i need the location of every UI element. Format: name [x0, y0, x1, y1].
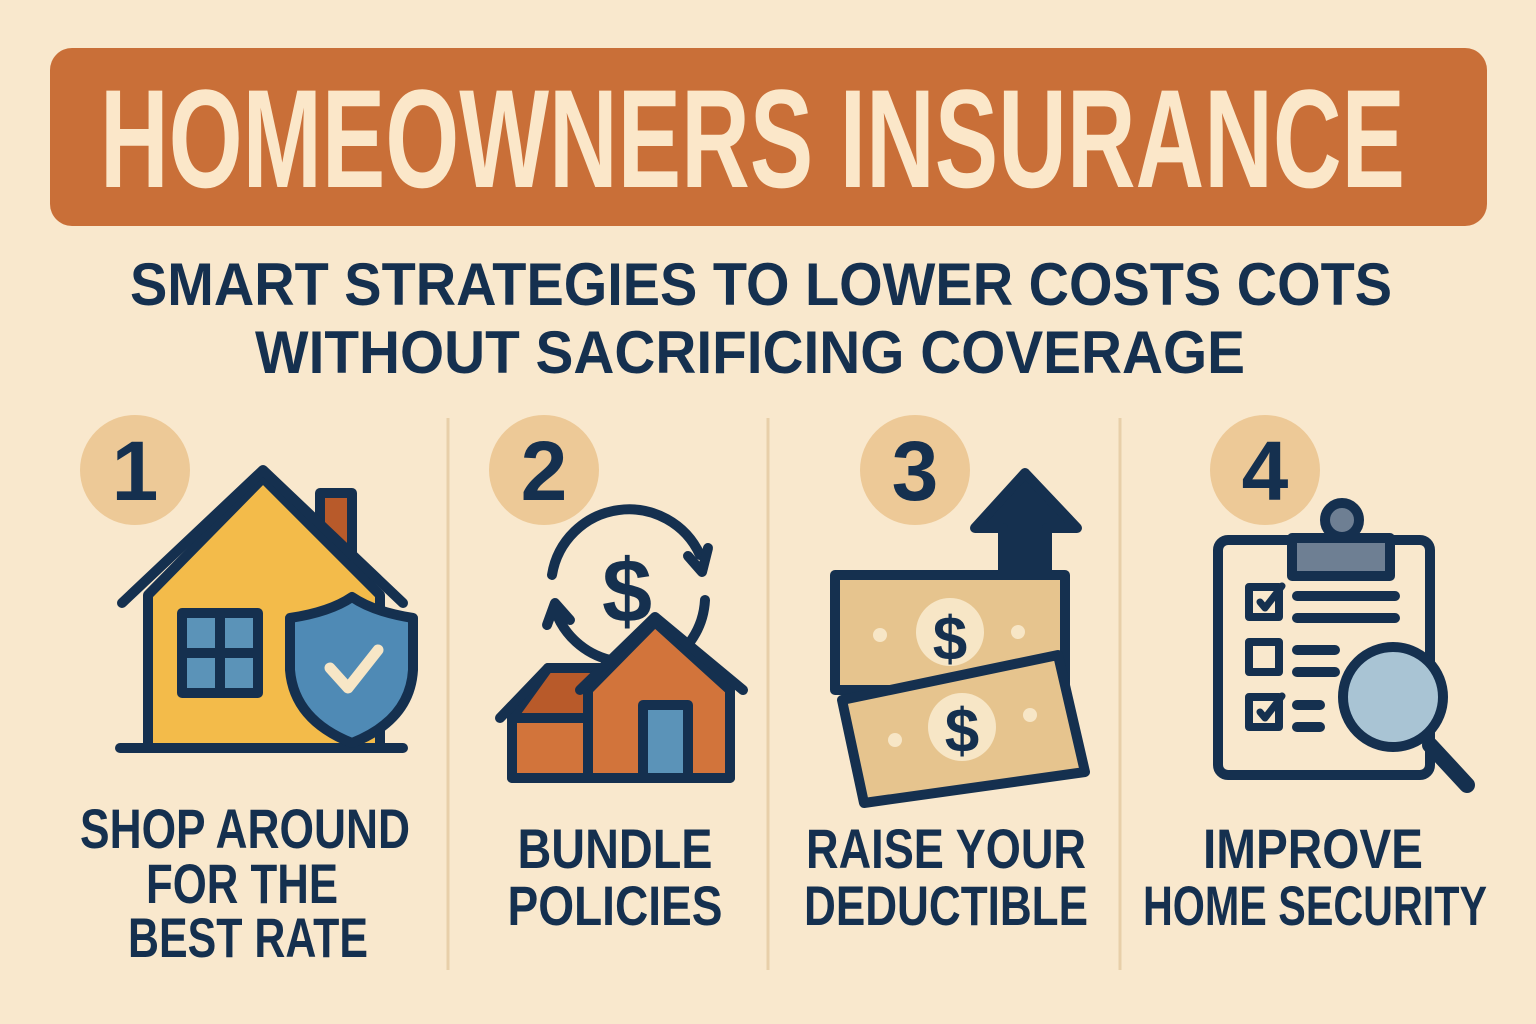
- number badge 2: 2: [521, 424, 567, 518]
- label 3: DEDUCTIBLE: [804, 874, 1088, 937]
- label 3: RAISE YOUR: [806, 817, 1086, 880]
- number badge 4: 4: [1242, 424, 1289, 518]
- step 2 panel: [489, 415, 743, 937]
- number badge 3: 3: [892, 424, 938, 518]
- label 1: [80, 797, 410, 969]
- number badge 3: [860, 415, 970, 525]
- label 4: IMPROVE: [1203, 817, 1423, 880]
- icon: house with shield: [120, 470, 413, 748]
- step 1 panel: [80, 415, 413, 969]
- icon: money with up arrow: $: [933, 605, 967, 674]
- icon: clipboard with magnifier: [1218, 503, 1467, 785]
- label 1: FOR THE: [146, 852, 338, 915]
- subtitle: [130, 251, 1392, 386]
- icon: bundle houses with dollar cycle: $: [602, 542, 652, 642]
- number badge 4: [1210, 415, 1320, 525]
- label 3: [804, 817, 1088, 937]
- label 2: [508, 817, 722, 937]
- number badge 1: 1: [112, 424, 158, 518]
- subtitle: WITHOUT SACRIFICING COVERAGE: [255, 319, 1245, 386]
- icon: money with up arrow: $: [945, 697, 979, 766]
- icon: bundle houses with dollar cycle: [500, 509, 743, 778]
- number badge 1: [80, 415, 190, 525]
- subtitle: SMART STRATEGIES TO LOWER COSTS COTS: [130, 251, 1392, 318]
- icon: money with up arrow: [835, 473, 1085, 803]
- step 3 panel: [804, 415, 1088, 937]
- number badge 2: [489, 415, 599, 525]
- label 4: [1143, 817, 1487, 937]
- label 1: SHOP AROUND: [80, 797, 410, 860]
- label 2: POLICIES: [508, 874, 722, 937]
- label 1: BEST RATE: [128, 906, 368, 969]
- label 2: BUNDLE: [518, 817, 712, 880]
- step 4 panel: [1143, 415, 1487, 937]
